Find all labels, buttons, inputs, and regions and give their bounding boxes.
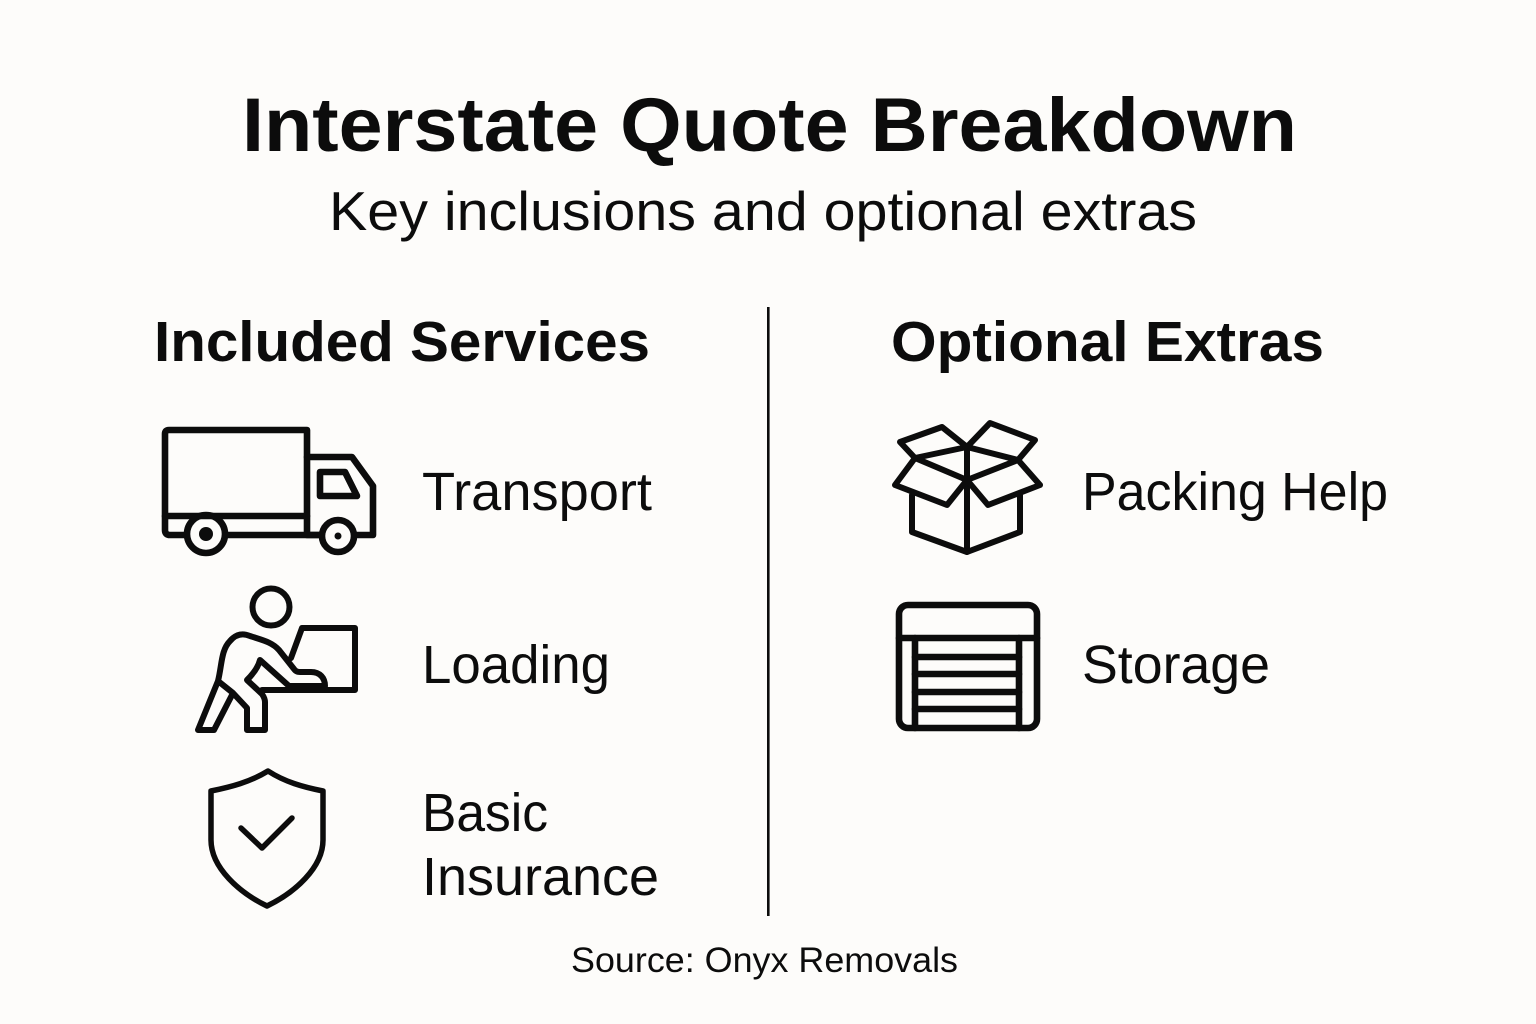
- icon: person loading box: [198, 588, 355, 730]
- label: basic insurance: Basic: [422, 783, 548, 843]
- label: basic insurance: Insurance: [422, 847, 659, 907]
- icon: storage roller door: [899, 605, 1037, 728]
- label: transport: Transport: [422, 462, 652, 522]
- subtitle: Key inclusions and optional extras: [329, 180, 1197, 242]
- panel: included services: [154, 310, 659, 907]
- label: loading: Loading: [422, 635, 610, 695]
- heading: included services: Included Services: [154, 310, 650, 374]
- icon: truck: [165, 430, 373, 553]
- heading: optional extras: Optional Extras: [891, 310, 1324, 374]
- label: storage: Storage: [1082, 635, 1270, 695]
- label: packing help: Packing Help: [1082, 462, 1388, 522]
- center divider: [767, 307, 770, 916]
- title: Interstate Quote Breakdown: [242, 83, 1297, 168]
- panel: optional extras: [891, 310, 1388, 728]
- source note: Source: Onyx Removals: [571, 941, 958, 980]
- icon: shield with check: [211, 771, 323, 906]
- icon: open box: [895, 423, 1040, 552]
- label: basic insurance: [422, 783, 659, 907]
